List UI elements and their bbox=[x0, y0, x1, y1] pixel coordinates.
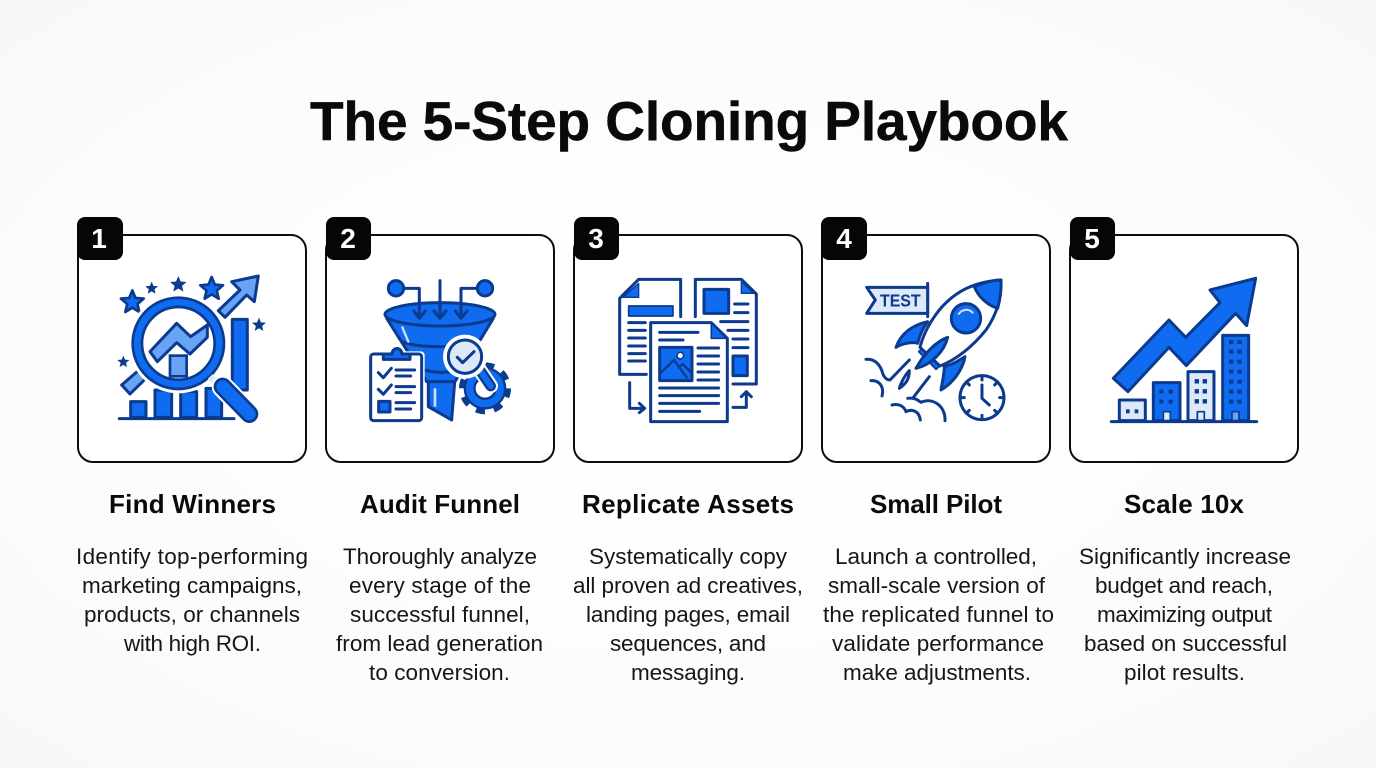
panel: step 5 Scale 10x bbox=[1070, 217, 1298, 685]
panel: step 1 Find Winners bbox=[76, 217, 308, 656]
description 4: small-scale version of bbox=[828, 573, 1046, 598]
icon: replicated documents bbox=[620, 279, 756, 422]
heading 2: Audit Funnel bbox=[360, 489, 520, 519]
number badge 2: 2 bbox=[340, 223, 356, 254]
number badge 3: 3 bbox=[588, 223, 604, 254]
number badge 1: 1 bbox=[91, 223, 107, 254]
icon: magnifier over rising chart bbox=[117, 276, 266, 419]
description 2: Thoroughly analyze bbox=[343, 544, 537, 569]
description 3: Systematically copy bbox=[589, 544, 788, 569]
icon: test rocket launch with clock bbox=[866, 280, 1004, 421]
description 2: to conversion. bbox=[369, 660, 510, 685]
description 4: make adjustments. bbox=[843, 660, 1031, 685]
description 3 bbox=[573, 544, 803, 685]
description 1: with high ROI. bbox=[123, 631, 261, 656]
panel: step 4 Small Pilot bbox=[821, 217, 1054, 685]
card frame 1 bbox=[78, 235, 306, 462]
number badge 2 bbox=[326, 217, 371, 260]
description 4 bbox=[823, 544, 1054, 685]
description 1: products, or channels bbox=[84, 602, 300, 627]
heading 3: Replicate Assets bbox=[582, 489, 794, 519]
card frame 5 bbox=[1070, 235, 1298, 462]
description 1: Identify top-performing bbox=[76, 544, 308, 569]
description 3: all proven ad creatives, bbox=[573, 573, 803, 598]
heading 5: Scale 10x bbox=[1124, 489, 1245, 519]
number badge 5 bbox=[1070, 217, 1115, 260]
description 5 bbox=[1079, 544, 1291, 685]
icon: funnel with clipboard, magnifier and gear bbox=[368, 281, 508, 423]
description 3: sequences, and bbox=[610, 631, 766, 656]
description 5: budget and reach, bbox=[1095, 573, 1273, 598]
description 2: from lead generation bbox=[336, 631, 543, 656]
panel: step 3 Replicate Assets bbox=[573, 217, 803, 685]
description 4: validate performance bbox=[832, 631, 1044, 656]
description 3: landing pages, email bbox=[586, 602, 790, 627]
panel: step 2 Audit Funnel bbox=[326, 217, 554, 685]
number badge 4 bbox=[821, 217, 867, 260]
icon: growth arrow over buildings bbox=[1111, 278, 1257, 422]
description 4: the replicated funnel to bbox=[823, 602, 1054, 627]
description 2: every stage of the bbox=[349, 573, 531, 598]
description 5: pilot results. bbox=[1124, 660, 1245, 685]
description 1: marketing campaigns, bbox=[82, 573, 302, 598]
number badge 3 bbox=[574, 217, 619, 260]
icon: test rocket launch with clock: TEST bbox=[880, 290, 921, 310]
description 4: Launch a controlled, bbox=[835, 544, 1037, 569]
description 3: messaging. bbox=[631, 660, 745, 685]
description 2: successful funnel, bbox=[350, 602, 530, 627]
title: The 5-Step Cloning Playbook bbox=[310, 90, 1068, 152]
heading 4: Small Pilot bbox=[870, 489, 1002, 519]
number badge 1 bbox=[77, 217, 123, 260]
heading 1: Find Winners bbox=[109, 489, 276, 519]
description 5: maximizing output bbox=[1097, 602, 1273, 627]
number badge 4: 4 bbox=[836, 223, 852, 254]
number badge 5: 5 bbox=[1084, 223, 1100, 254]
description 5: Significantly increase bbox=[1079, 544, 1291, 569]
description 2 bbox=[336, 544, 543, 685]
description 5: based on successful bbox=[1084, 631, 1287, 656]
description 1 bbox=[76, 544, 308, 656]
card frame 3 bbox=[574, 235, 802, 462]
card frame 2 bbox=[326, 235, 554, 462]
card frame 4 bbox=[822, 235, 1050, 462]
